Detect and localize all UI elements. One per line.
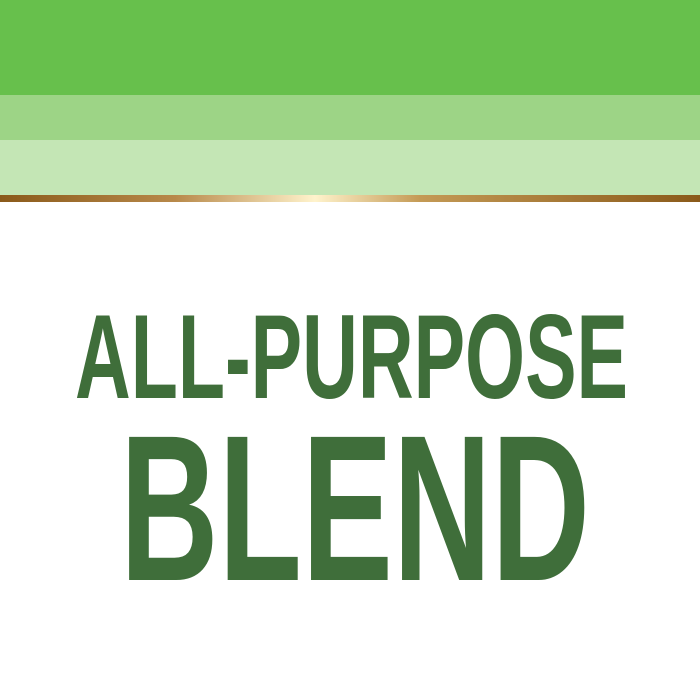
gold rule — [0, 195, 700, 202]
band: dark green — [0, 0, 700, 95]
band: mid green — [0, 95, 700, 140]
band: light green — [0, 140, 700, 195]
